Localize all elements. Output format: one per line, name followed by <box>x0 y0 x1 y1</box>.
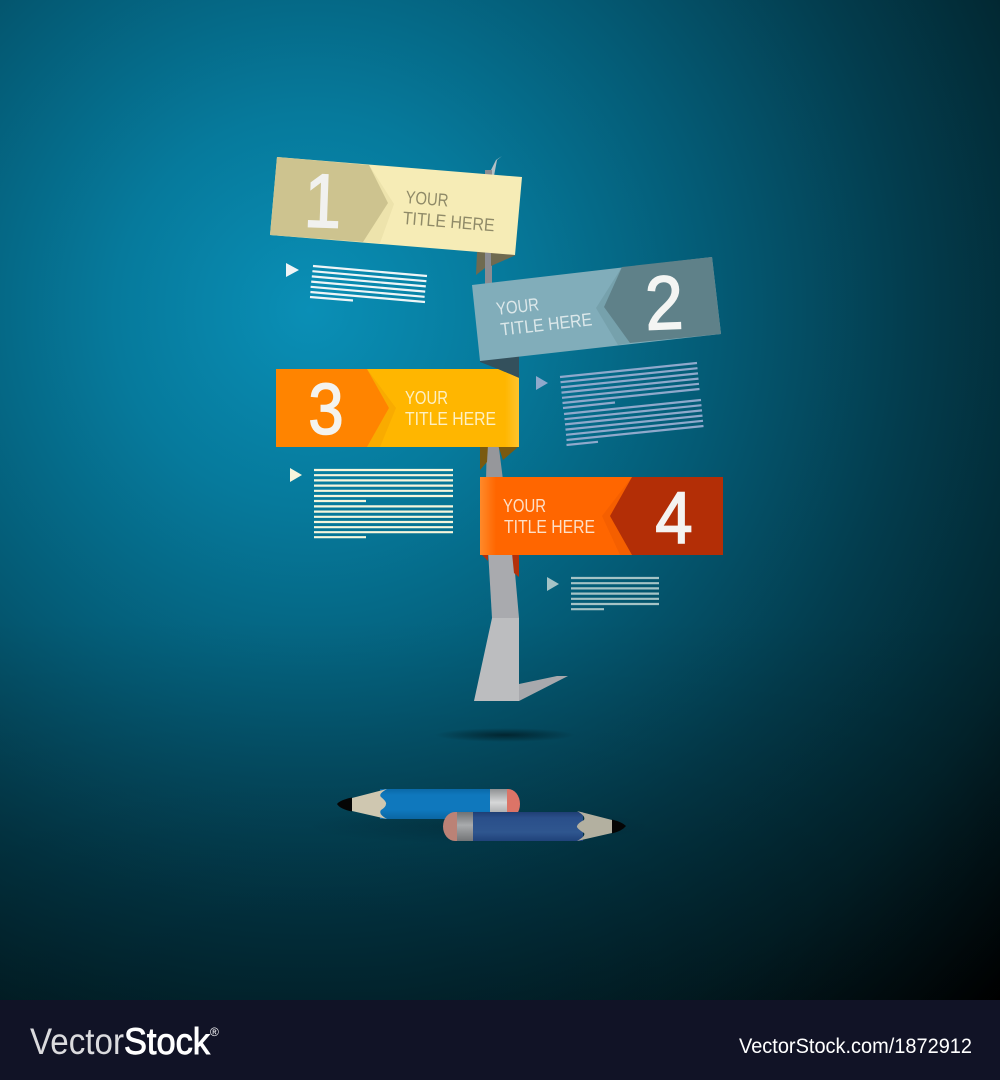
sign 4 title <box>503 496 595 537</box>
sign 2 title: YOUR <box>495 294 540 319</box>
sign 4 title: TITLE HERE <box>504 517 595 537</box>
footer logo: ® <box>210 1025 219 1039</box>
pencil 2 <box>443 811 626 841</box>
pole shadow <box>435 728 575 742</box>
sign 3 title: YOUR <box>405 388 448 408</box>
sign 4 title: YOUR <box>503 496 546 516</box>
number 4: 4 <box>655 477 693 559</box>
footer logo <box>30 1021 219 1062</box>
text lines 2 <box>560 363 704 445</box>
footer logo: Stock <box>124 1021 210 1062</box>
sign 1 title <box>402 187 497 235</box>
footer logo: Vector <box>30 1021 124 1062</box>
text lines 4 <box>571 578 659 609</box>
bullet arrow 3 <box>290 468 302 482</box>
fold: sign 2 <box>480 355 519 378</box>
fold: sign 3 <box>480 445 518 470</box>
sign 3 <box>276 369 519 450</box>
number 3: 3 <box>308 370 344 450</box>
number 1: 1 <box>303 158 343 245</box>
footer image id: VectorStock.com/1872912 <box>739 1035 972 1058</box>
sign 2 title <box>495 288 593 340</box>
fold: sign 4 <box>480 553 519 577</box>
bullet arrow 1 <box>286 263 299 277</box>
sign 4 <box>480 477 723 559</box>
sign 2 <box>472 257 721 361</box>
sign 3 title <box>405 388 496 429</box>
sign 1 <box>270 157 522 255</box>
bullet arrow 2 <box>536 376 548 390</box>
sign 2 title: TITLE HERE <box>499 309 593 340</box>
sign 1 title: TITLE HERE <box>402 208 495 235</box>
fold: sign 1 <box>476 252 516 275</box>
number 2: 2 <box>644 261 685 346</box>
pencil shadow <box>305 808 655 844</box>
background lower shading <box>0 620 1000 1000</box>
sign 3 title: TITLE HERE <box>405 409 496 429</box>
pencil 1 <box>337 789 520 819</box>
text lines 1 <box>310 266 427 302</box>
signpost pole <box>474 156 568 701</box>
text lines 3 <box>314 470 453 537</box>
footer bar <box>0 1000 1000 1080</box>
bullet arrow 4 <box>547 577 559 591</box>
sign 1 title: YOUR <box>405 187 449 211</box>
